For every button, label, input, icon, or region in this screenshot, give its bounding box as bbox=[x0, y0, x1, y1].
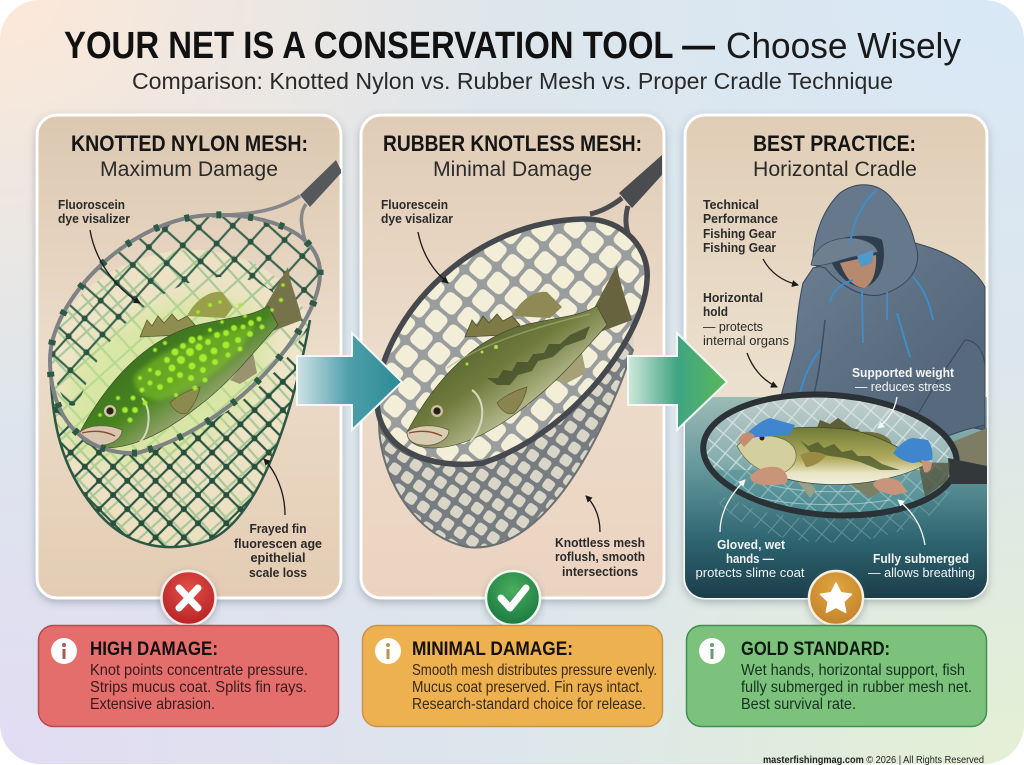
callout: technical performance gear: Performance bbox=[703, 211, 778, 226]
fish: clean bass bbox=[407, 265, 632, 448]
badge: cross bbox=[162, 571, 216, 625]
badge: check bbox=[486, 571, 540, 625]
callout: horizontal hold: Horizontal bbox=[703, 290, 763, 305]
callout: horizontal hold bbox=[703, 290, 789, 387]
body text: gold standard: fully submerged in rubber mesh net. bbox=[741, 679, 972, 696]
blue accent seams and cords bbox=[830, 190, 933, 357]
info box: gold standard bbox=[686, 626, 986, 726]
panel: rubber knotless mesh bbox=[361, 115, 664, 598]
body text: minimal damage: Research-standard choice for release. bbox=[412, 696, 646, 713]
panel subheading: minimal damage: Minimal Damage bbox=[433, 158, 592, 181]
cap bbox=[811, 238, 878, 266]
panel subheading: horizontal cradle: Horizontal Cradle bbox=[753, 158, 917, 181]
callout: fluorescein dye visalizar: dye visalizar bbox=[381, 211, 453, 226]
icon: info bbox=[51, 638, 77, 664]
fish: dye-fluorescing bass bbox=[80, 267, 302, 448]
right arm sleeve bbox=[918, 340, 984, 436]
heading: high damage: HIGH DAMAGE: bbox=[90, 639, 218, 660]
callout: horizontal hold: internal organs bbox=[703, 333, 789, 348]
callout: supported weight bbox=[852, 365, 955, 428]
body text: high damage: Strips mucus coat. Splits fin rays. bbox=[90, 679, 307, 696]
callout: fluorescein dye visalizer: dye visalizer bbox=[58, 211, 130, 226]
callout: gloved wet hands: hands — bbox=[726, 551, 774, 566]
body text: minimal damage bbox=[412, 662, 657, 713]
callout: fluorescein dye visalizer bbox=[58, 197, 140, 303]
callout: frayed fin: Frayed fin bbox=[250, 521, 307, 536]
fish: cradled bass bbox=[737, 427, 925, 485]
body text: high damage: Knot points concentrate pressure. bbox=[90, 662, 308, 679]
info box: minimal damage bbox=[362, 626, 662, 726]
hood bbox=[813, 185, 918, 295]
body text: high damage: Extensive abrasion. bbox=[90, 696, 215, 713]
panel: knotted nylon mesh bbox=[30, 115, 342, 598]
body text: gold standard: Wet hands, horizontal support, fish bbox=[741, 662, 965, 679]
body text: gold standard: Best survival rate. bbox=[741, 696, 856, 713]
tail and fins of cradled fish bbox=[918, 462, 950, 497]
title accent: choose wisely: Choose Wisely bbox=[726, 25, 961, 66]
water bbox=[685, 397, 987, 598]
panel heading: best practice: BEST PRACTICE: bbox=[753, 131, 916, 156]
callout: technical performance gear: Fishing Gear bbox=[703, 240, 776, 255]
body text: minimal damage: Smooth mesh distributes pressure evenly. bbox=[412, 662, 657, 679]
callout: fully submerged: — allows breathing bbox=[868, 565, 975, 580]
info box: high damage bbox=[38, 626, 338, 726]
callout: technical performance gear: Fishing Gear bbox=[703, 226, 776, 241]
callout: frayed fin: scale loss bbox=[249, 565, 307, 580]
body text: gold standard bbox=[741, 662, 972, 713]
callout: fluorescein dye visalizar bbox=[381, 197, 453, 283]
heading: gold standard: GOLD STANDARD: bbox=[741, 639, 890, 660]
callout: knottless mesh: intersections bbox=[562, 564, 638, 579]
callout: fluorescein dye visalizer: Fluoroscein bbox=[58, 197, 125, 212]
panel heading: rubber knotless: RUBBER KNOTLESS MESH: bbox=[383, 131, 642, 156]
face with sunglasses bbox=[840, 255, 876, 288]
badge: star bbox=[809, 571, 863, 625]
callout: technical performance gear bbox=[703, 197, 798, 285]
callout: frayed fin bbox=[234, 459, 322, 580]
subtitle: Comparison: Knotted Nylon vs. Rubber Mesh vs. Proper Cradle Technique bbox=[132, 68, 893, 94]
callout: gloved wet hands: Gloved, wet bbox=[717, 537, 786, 552]
icon: info bbox=[375, 638, 401, 664]
callout: technical performance gear: Technical bbox=[703, 197, 759, 212]
callout: fully submerged: Fully submerged bbox=[873, 551, 969, 566]
illustration: angler cradling fish in water bbox=[685, 185, 987, 598]
khaki trousers bbox=[953, 428, 987, 466]
panel: best practice horizontal cradle bbox=[685, 115, 987, 598]
callout: knottless mesh: Knottless mesh bbox=[555, 535, 645, 550]
body text: minimal damage: Mucus coat preserved. Fin rays intact. bbox=[412, 679, 643, 696]
left forearm bbox=[772, 400, 810, 426]
callout: horizontal hold: hold bbox=[703, 304, 728, 319]
fluorescent green spots bbox=[98, 283, 285, 422]
illustration: rubber net with fish bbox=[377, 155, 662, 547]
body text: high damage bbox=[90, 662, 308, 713]
callout: knottless mesh: roflush, smooth bbox=[555, 549, 645, 564]
callout: supported weight: Supported weight bbox=[852, 365, 955, 380]
callout: horizontal hold: — protects bbox=[703, 319, 763, 334]
arrow: rubber to cradle bbox=[628, 333, 727, 430]
callout: knottless mesh bbox=[555, 496, 645, 579]
panel heading: knotted nylon: KNOTTED NYLON MESH: bbox=[71, 131, 308, 156]
torso and sleeves bbox=[780, 243, 985, 430]
panel subheading: maximum damage: Maximum Damage bbox=[100, 158, 278, 181]
callout: frayed fin: fluorescen age bbox=[234, 536, 322, 551]
callout: fluorescein dye visalizar: Fluorescein bbox=[381, 197, 448, 212]
gloved hands bbox=[738, 418, 933, 495]
callout: gloved wet hands: protects slime coat bbox=[696, 565, 805, 580]
callout: frayed fin: epithelial bbox=[250, 550, 306, 565]
callout: gloved wet hands bbox=[696, 480, 805, 580]
callout: fully submerged bbox=[868, 500, 975, 580]
icon: info bbox=[699, 638, 725, 664]
callout: supported weight: — reduces stress bbox=[855, 379, 951, 394]
net hoop and mesh bbox=[699, 386, 987, 542]
fluorescence glow bbox=[134, 325, 255, 400]
illustration: knotted net with fish bbox=[30, 160, 342, 547]
angler in hoodie bbox=[772, 185, 987, 470]
heading: minimal damage: MINIMAL DAMAGE: bbox=[412, 639, 573, 660]
arrow: nylon to rubber bbox=[297, 333, 402, 430]
title: YOUR NET IS A CONSERVATION TOOL — bbox=[64, 25, 715, 67]
